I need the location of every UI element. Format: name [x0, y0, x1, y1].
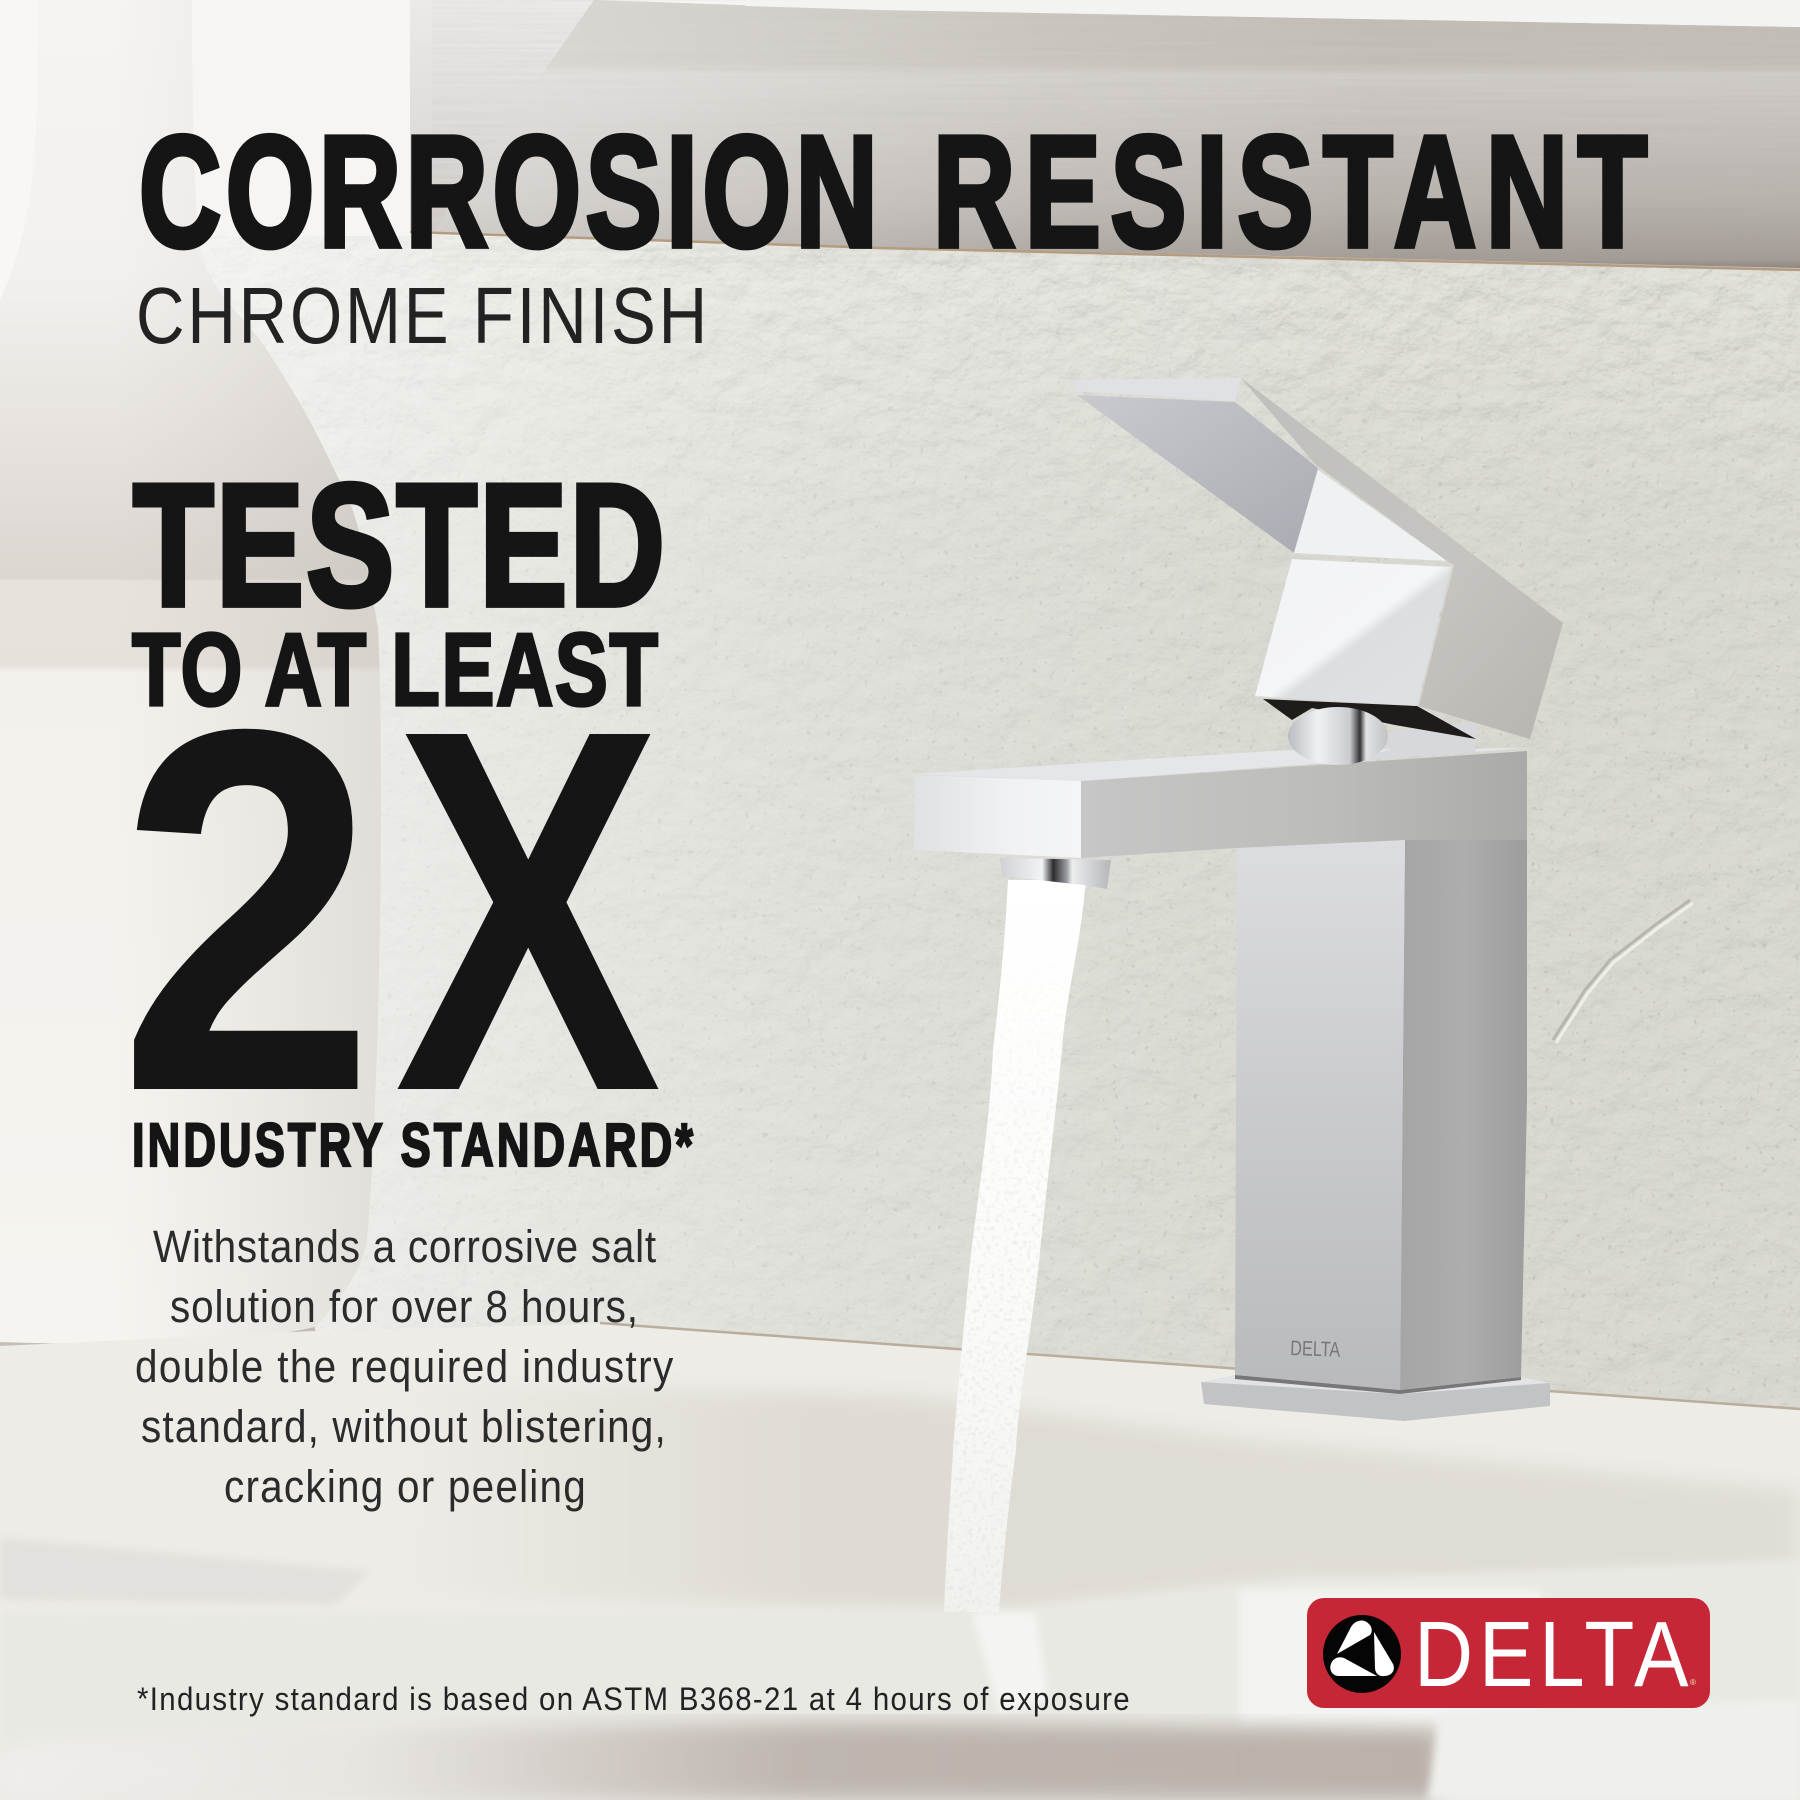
water reflection	[972, 1612, 1048, 1712]
tested: TESTED	[133, 447, 665, 642]
logo badge	[1307, 1598, 1710, 1708]
letter X: X	[394, 623, 664, 1199]
description text: cracking or peeling	[224, 1462, 586, 1513]
description text: Withstands a corrosive salt	[153, 1222, 656, 1273]
wall behind window	[192, 0, 410, 236]
faucet brand mark: DELTA	[1290, 1337, 1341, 1362]
handle underside	[1077, 395, 1318, 553]
registered mark: ®	[1690, 1678, 1696, 1687]
handle side	[1241, 378, 1563, 739]
window recess	[410, 0, 1800, 270]
handle base plate	[1340, 722, 1476, 762]
handle front upper	[1294, 470, 1447, 561]
logo backdrop highlight	[1240, 1590, 1540, 1725]
description text: double the required industry	[135, 1342, 674, 1393]
footnote: *Industry standard is based on ASTM B368-21 at 4 hours of exposure	[137, 1681, 1130, 1717]
base plate shadow line	[1235, 1375, 1521, 1394]
faucet arm side	[1081, 751, 1527, 858]
faucet column front	[1235, 840, 1405, 1390]
water stream	[944, 880, 1086, 1712]
headline: CORROSION	[139, 104, 878, 280]
handle dome	[1288, 707, 1388, 765]
headline	[139, 104, 1647, 280]
handle top plate	[1075, 378, 1241, 401]
handle front box	[1255, 559, 1451, 706]
claim block	[118, 447, 693, 1199]
description text: solution for over 8 hours,	[170, 1282, 638, 1333]
vase	[0, 0, 381, 1346]
faucet arm top	[914, 748, 1527, 781]
logo mark	[1323, 1615, 1401, 1693]
foreground ledge shadow	[0, 1538, 370, 1605]
handle undercut	[1263, 699, 1476, 739]
industry standard: INDUSTRY STANDARD*	[132, 1111, 693, 1180]
lower basin interior	[0, 1722, 1440, 1800]
foreground ledge	[0, 1560, 1800, 1800]
faucet column side	[1400, 760, 1527, 1390]
top window light	[745, 0, 1800, 27]
window frame	[410, 0, 1800, 270]
headline: RESISTANT	[933, 104, 1647, 280]
description text: standard, without blistering,	[141, 1402, 666, 1453]
base plate	[1201, 1382, 1550, 1421]
to at least: TO AT LEAST	[132, 613, 658, 727]
faucet	[914, 378, 1563, 1421]
sink corner	[1428, 1700, 1800, 1800]
counter top	[0, 1324, 1800, 1800]
delta logo	[1307, 1598, 1710, 1708]
basin	[380, 1380, 1800, 1612]
numeral 2: 2	[118, 623, 376, 1199]
aerator	[1000, 858, 1111, 889]
faucet arm front	[914, 775, 1081, 858]
sub-headline: CHROME FINISH	[136, 270, 707, 360]
logo wordmark: DELTA	[1414, 1602, 1689, 1706]
plaster wall	[202, 235, 1800, 1408]
base plate top	[1201, 1375, 1550, 1394]
description text	[135, 1222, 674, 1513]
